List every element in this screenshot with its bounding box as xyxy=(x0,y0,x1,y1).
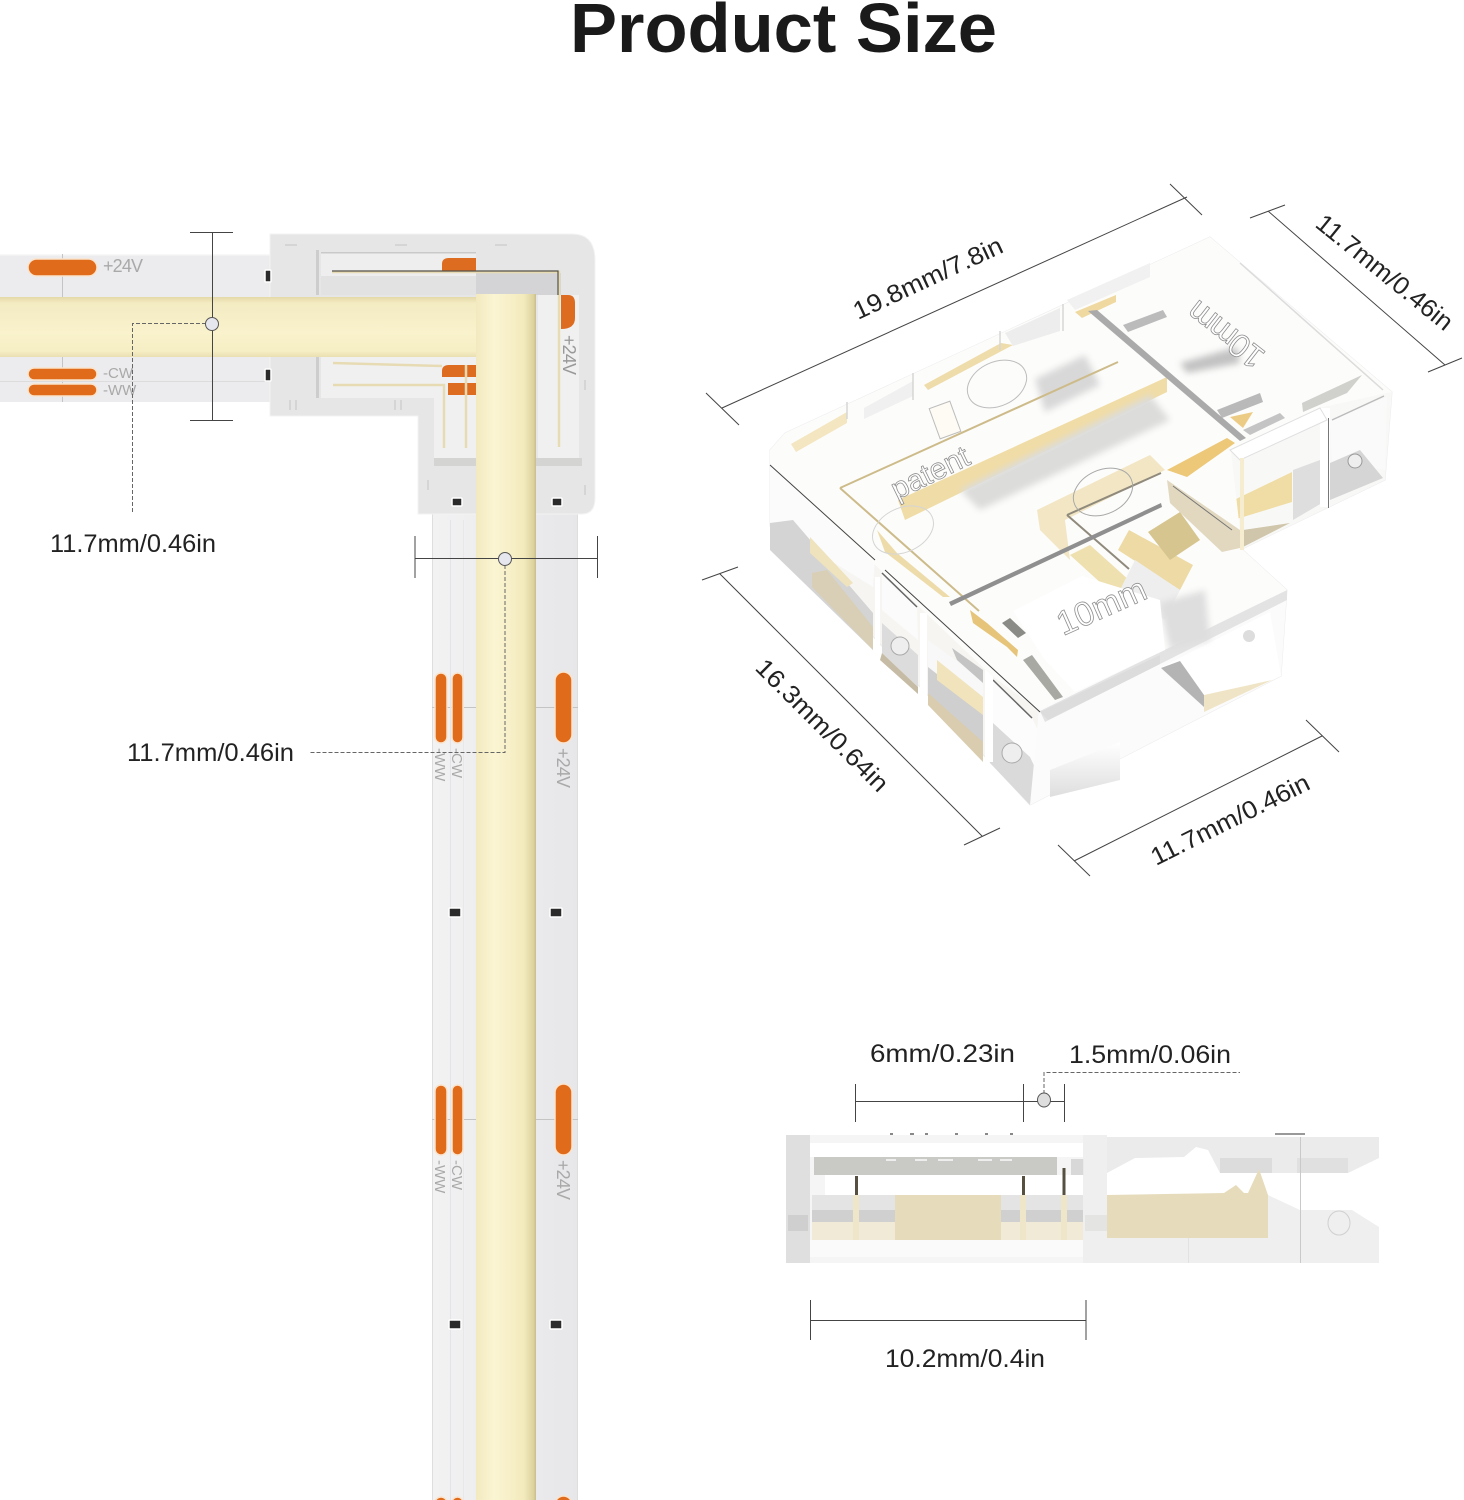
dimension: front width xyxy=(1058,720,1339,876)
embossed text on connector: 10mm xyxy=(1179,293,1271,377)
vertical LED strip: -CW xyxy=(448,748,465,779)
label: front width: 11.7mm/0.46in xyxy=(1146,769,1314,871)
label: vertical strip width: 11.7mm/0.46in xyxy=(127,739,294,767)
vertical LED strip xyxy=(431,510,578,1500)
connector housing xyxy=(265,234,595,514)
embossed text on connector xyxy=(886,293,1271,643)
embossed text on connector: 10mm xyxy=(1051,570,1153,643)
vertical LED strip: -CW xyxy=(448,1160,465,1191)
label: overall length: 19.8mm/7.8in xyxy=(849,232,1007,325)
dimension: left depth xyxy=(702,567,1000,845)
vertical LED strip: -WW xyxy=(431,1160,448,1194)
horizontal LED strip: -CW xyxy=(103,365,134,382)
diagram: L connector top view with COB strip xyxy=(0,234,595,1500)
embossed text on connector: patent xyxy=(886,440,976,506)
label: right width: 11.7mm/0.46in xyxy=(1310,209,1458,336)
horizontal LED strip xyxy=(0,254,272,402)
vertical LED strip: -WW xyxy=(431,748,448,782)
horizontal COB light band xyxy=(0,297,478,357)
horizontal LED strip: -WW xyxy=(103,382,137,399)
left housing xyxy=(786,1134,1107,1263)
left side face xyxy=(770,465,1047,805)
label: 1.5mm: 1.5mm/0.06in xyxy=(1069,1041,1231,1069)
right side face xyxy=(1207,392,1392,549)
label: 6mm: 6mm/0.23in xyxy=(870,1040,1015,1068)
connector housing: +24V xyxy=(559,335,579,375)
top face xyxy=(770,237,1392,720)
diagram: connector side view xyxy=(786,1133,1379,1263)
diagram: transparent connector isometric view xyxy=(770,237,1392,805)
dimension: strip width, bottom xyxy=(310,536,598,752)
front side face xyxy=(1030,590,1287,805)
vertical COB light band xyxy=(476,294,536,1500)
dimension: right width xyxy=(1250,205,1462,372)
dimension: overall length xyxy=(706,184,1202,425)
label: left depth: 16.3mm/0.64in xyxy=(750,653,894,798)
dimension: 10.2mm xyxy=(810,1300,1086,1340)
label: 10.2mm: 10.2mm/0.4in xyxy=(885,1345,1045,1373)
vertical LED strip: +24V xyxy=(553,748,573,788)
dimension: strip width, left xyxy=(132,232,233,514)
vertical LED strip: +24V xyxy=(553,1160,573,1200)
right housing xyxy=(1107,1133,1379,1263)
label: left width: 11.7mm/0.46in xyxy=(50,530,216,558)
metal contact lines xyxy=(949,310,1246,606)
dimension: 6mm and 1.5mm xyxy=(855,1072,1240,1122)
horizontal LED strip: +24V xyxy=(103,256,143,276)
connector silhouette xyxy=(770,237,1392,805)
